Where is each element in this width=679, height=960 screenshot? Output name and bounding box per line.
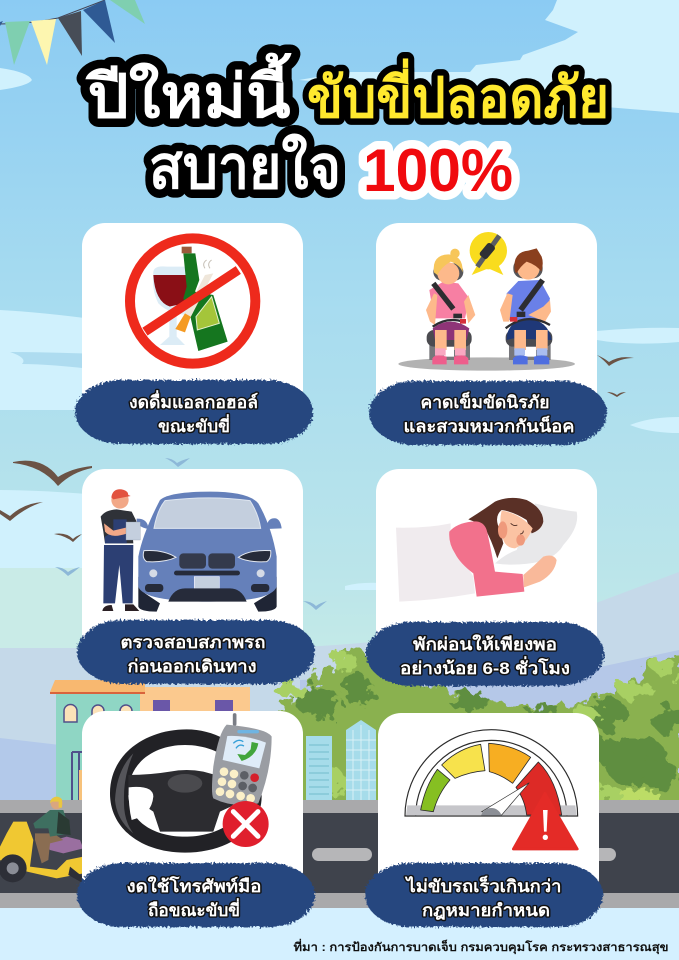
label blob [365, 863, 603, 927]
label text [126, 876, 262, 920]
label text: ไม่ขับรถเร็วเกินกว่า [404, 874, 562, 896]
label text: คาดเข็มขัดนิรภัย [420, 390, 550, 412]
icon: steering wheel and phone [110, 715, 272, 853]
title: ปีใหม่นี้ [84, 52, 293, 130]
distant hills [0, 572, 679, 800]
label text: ตรวจสอบสภาพรถ [120, 633, 266, 652]
card 4: sleep [366, 469, 604, 686]
label text [129, 390, 258, 436]
source note: ที่มา : การป้องกันการบาดเจ็บ กรมควบคุมโรค กระทรวงสาธารณสุข [294, 938, 669, 955]
card 2: seat belt [369, 223, 607, 445]
icon: children with seat belts [398, 232, 575, 371]
city towers [306, 720, 376, 800]
label text [120, 633, 266, 676]
label text: งดดื่มแอลกอฮอล์ [129, 390, 258, 412]
trees [265, 647, 679, 820]
mechanic [103, 545, 133, 603]
bunting flags [0, 0, 145, 65]
label text: ก่อนออกเดินทาง [128, 657, 256, 676]
card 1: no alcohol [75, 223, 313, 444]
buildings [50, 680, 250, 800]
icon: no drinking or smoking [130, 238, 255, 364]
speech bubble buckle [470, 232, 507, 275]
boy [500, 248, 552, 364]
icon: mechanic and car [101, 489, 282, 612]
icon: sleeping woman [396, 498, 577, 602]
label text [404, 390, 574, 436]
label blob [77, 863, 315, 927]
girl [426, 249, 475, 364]
card 6: speed limit [365, 713, 603, 927]
card 3: check car [77, 469, 315, 684]
label text: และสวมหมวกกันน็อค [404, 414, 574, 436]
label text: อย่างน้อย 6-8 ชั่วโมง [400, 656, 570, 678]
clouds [0, 0, 679, 648]
label blob [369, 381, 607, 445]
road [0, 800, 679, 960]
title: สบายใจ [149, 133, 341, 201]
birds [0, 355, 634, 610]
label text: ถือขณะขับขี่ [148, 898, 240, 920]
icon: speedometer and warning [405, 730, 578, 849]
label blob [366, 622, 604, 686]
card 5: no phone [77, 711, 315, 927]
label text: กฎหมายกำหนด [422, 901, 550, 920]
label text: พักผ่อนให้เพียงพอ [413, 634, 557, 654]
scooter rider [0, 797, 87, 883]
label text: ขณะขับขี่ [158, 414, 230, 436]
label text [404, 874, 562, 920]
title [84, 52, 609, 204]
label text [400, 634, 570, 678]
label text: งดใช้โทรศัพท์มือ [126, 876, 262, 896]
label blob [75, 380, 313, 444]
label blob [77, 620, 315, 684]
title: ขับขี่ปลอดภัย [307, 58, 609, 129]
title: 100% [363, 137, 513, 204]
